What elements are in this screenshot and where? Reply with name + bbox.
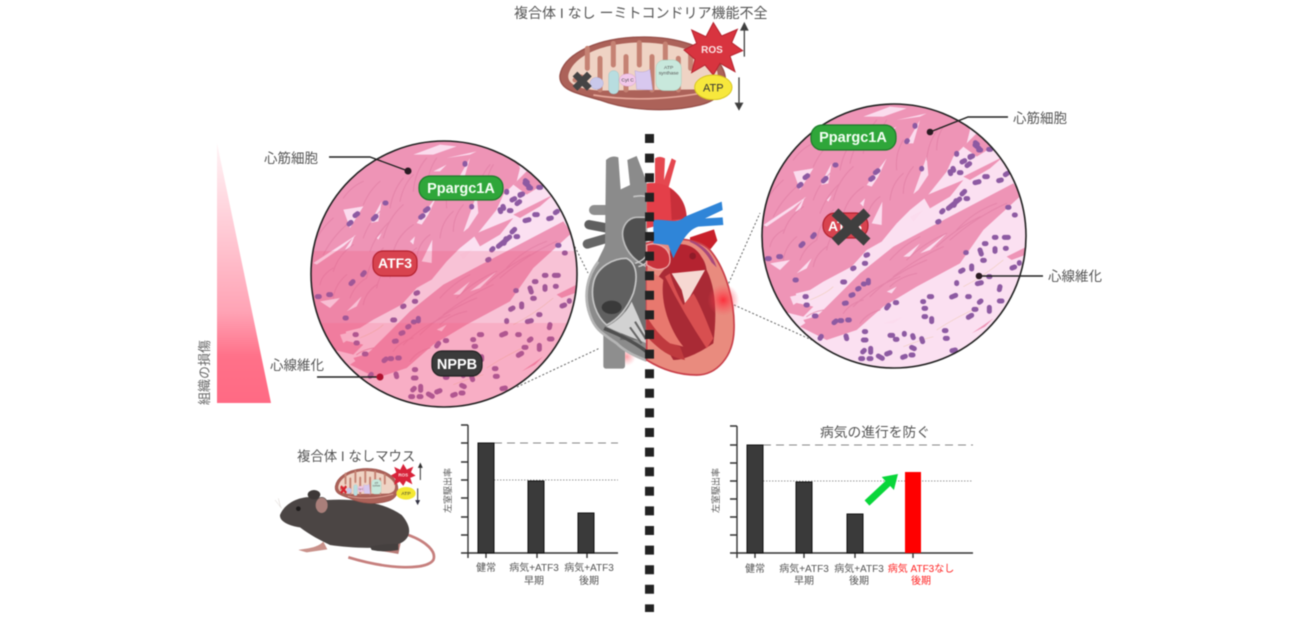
icon: ATP badge: ATP: [703, 82, 724, 94]
icon: complex I knocked out X: [575, 74, 589, 88]
axis label: 左室駆出率: [710, 468, 721, 513]
mini ROS star: [391, 464, 416, 486]
mini ROS star: ROS: [398, 473, 408, 478]
icon: ROS starburst: [684, 23, 743, 75]
label: complex I knockout mouse: 複合体 I なしマウス: [297, 448, 415, 464]
category label: disease early: 病気+ATF3: [509, 563, 559, 574]
gradient triangle: tissue damage: [217, 143, 271, 403]
leader line: cardiomyocyte right: [927, 117, 1008, 135]
pill: ATF3 left: ATF3: [378, 255, 412, 271]
title: mitochondrial dysfunction: 複合体 I なし ーミトコンドリア機能不全: [514, 5, 768, 21]
bar chart: left, EF by stage: [442, 425, 618, 587]
heart: red healthy half: [647, 157, 734, 375]
panel: left tissue circle: [309, 139, 579, 409]
category label: disease late: 後期: [579, 574, 599, 587]
category label: disease early: 病気+ATF3: [779, 564, 829, 575]
mini mitochondrion: [335, 468, 398, 503]
chart heading: 病気の進行を防ぐ: [820, 425, 930, 440]
mitochondrion illustration: [560, 23, 748, 110]
dotted connector lines: [517, 213, 812, 387]
mini ATP badge: [396, 487, 416, 500]
mini arrow down: [416, 488, 419, 504]
category label: healthy: 健常: [476, 561, 496, 574]
axis label: 左室駆出率: [442, 468, 453, 513]
dashed central divider: [645, 134, 654, 612]
bar: disease late: [578, 513, 594, 553]
icon: ROS starburst: ROS: [701, 45, 723, 56]
mini arrow up: [419, 464, 422, 480]
bar: healthy: [478, 443, 494, 553]
mini ATP badge: ATP: [401, 491, 411, 497]
category label: healthy: 健常: [745, 562, 765, 575]
bar: ATF3 knockout late: [905, 472, 921, 553]
category label: disease early: 早期: [524, 575, 544, 587]
pill: ATF3 left: [373, 251, 417, 276]
bar: disease early: [528, 481, 544, 553]
pill: Ppargc1A left: [419, 176, 503, 200]
category label: disease late: 後期: [849, 574, 869, 587]
arrow: ROS up: [741, 23, 748, 57]
pill: NPPB: NPPB: [437, 357, 477, 373]
category label: ATF3 knockout late: 後期: [911, 574, 931, 587]
bar: disease early: [796, 482, 812, 553]
category label: ATF3 knockout late: 病気 ATF3なし: [888, 564, 954, 575]
category label: disease late: 病気+ATF3: [834, 564, 884, 575]
pill: Ppargc1A left: Ppargc1A: [427, 181, 495, 197]
label: fibrosis left: 心線維化: [270, 358, 324, 373]
arrow: ATP down: [736, 77, 742, 109]
leader line: cardiomyocyte left: [329, 157, 412, 174]
label: cardiomyocyte left: 心筋細胞: [264, 150, 318, 166]
pill: Ppargc1A right: [811, 125, 896, 150]
pill: ATF3 crossed out: [823, 212, 868, 242]
axis label: tissue damage: 組織の損傷: [197, 340, 212, 405]
heart illustration: [587, 156, 739, 375]
label: fibrosis right: 心線維化: [1048, 269, 1102, 284]
category label: disease early: 早期: [794, 575, 814, 587]
leader line: fibrosis left: [317, 374, 384, 380]
pill: Ppargc1A right: Ppargc1A: [819, 130, 887, 146]
pill: ATF3 crossed out: ATF3: [828, 218, 862, 234]
mouse illustration: [275, 464, 434, 567]
leader line: fibrosis right: [976, 273, 1043, 279]
heart: red highlight glow: [707, 284, 739, 316]
icon: ATP badge: [695, 75, 732, 100]
bar: healthy: [747, 445, 763, 553]
heart: grey diseased half: [587, 156, 647, 369]
bar: disease late: [847, 514, 863, 553]
pill: NPPB: [432, 351, 482, 376]
panel: right tissue circle: [760, 102, 1028, 370]
label: cardiomyocyte right: 心筋細胞: [1013, 110, 1067, 126]
bar chart: right, EF with ATF3 knockout: [710, 425, 973, 587]
category label: disease late: 病気+ATF3: [564, 563, 614, 574]
arrow: improvement: [865, 474, 898, 506]
